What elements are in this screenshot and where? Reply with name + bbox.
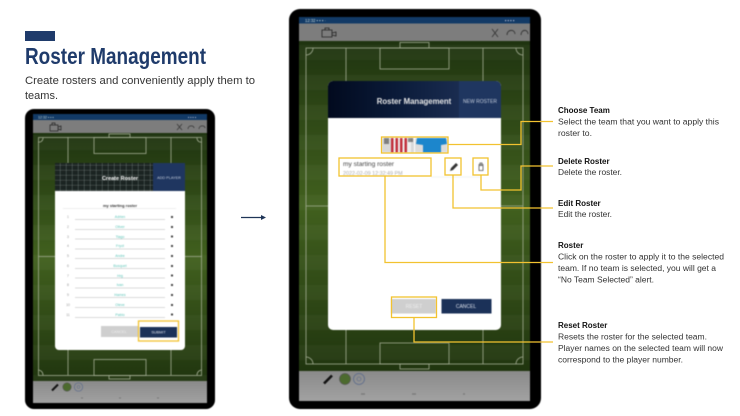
description text: teams. — [25, 90, 58, 102]
player list: Tiago — [116, 235, 124, 239]
modal: roster management — [328, 81, 501, 330]
player list: 11 — [66, 313, 70, 317]
status bar: 12:32 ▪ ▪ ▪ · — [305, 18, 326, 23]
description text — [25, 75, 255, 102]
status bar: ▪ ▪ ▪ ▪ — [188, 116, 196, 120]
roster entry — [343, 161, 480, 177]
annotation: choose team — [558, 106, 719, 138]
player list: Hrg — [117, 274, 123, 278]
icon: delete trash — [478, 163, 484, 170]
submit button: SUBMIT — [151, 330, 166, 334]
annotation: roster: team. If no team is selected, you will get a — [558, 264, 717, 273]
description text: Create rosters and conveniently apply them to — [25, 75, 255, 87]
player list: Oliver — [115, 225, 125, 229]
player list: 10 — [66, 303, 70, 307]
top toolbar — [33, 120, 207, 133]
player list: 3 — [67, 235, 69, 239]
player list: Adrien — [115, 215, 125, 219]
player list: Fryct — [116, 244, 124, 248]
annotation: delete roster: Delete the roster. — [558, 168, 622, 177]
soccer field — [33, 133, 207, 381]
modal header photo — [55, 163, 153, 191]
status bar: 12:32 ▪ ▪ ▪ — [38, 116, 54, 120]
annotation: reset roster: Resets the roster for the selected team. — [558, 332, 707, 342]
annotation: edit roster — [558, 199, 612, 219]
annotation: edit roster: Edit the roster. — [558, 210, 612, 219]
annotation: reset roster — [558, 321, 723, 364]
submit button — [140, 327, 177, 338]
player list — [63, 208, 176, 318]
modal heading: Create Roster — [102, 176, 139, 182]
tablet body — [25, 109, 215, 409]
connector: edit roster — [453, 175, 553, 208]
player list: Pablo — [115, 313, 125, 317]
connector: reset roster — [414, 318, 553, 342]
modal heading: Roster Management — [377, 97, 452, 106]
reset button: RESET — [406, 304, 422, 310]
status bar — [299, 17, 530, 24]
annotation: reset roster: correspond to the player number. — [558, 356, 683, 364]
status bar — [33, 114, 207, 120]
team jerseys — [382, 138, 448, 152]
arrow — [241, 215, 266, 220]
soccer field — [299, 41, 530, 371]
modal: create roster — [55, 163, 185, 350]
annotation: reset roster: Player names on the selected team will now — [558, 344, 723, 353]
connector: delete roster — [481, 166, 553, 190]
left tablet: create roster screen — [25, 109, 215, 409]
highlight: roster — [339, 158, 431, 176]
annotation: choose team: Select the team that you want to apply this — [558, 118, 719, 126]
player list: 1 — [67, 215, 69, 219]
player list: 5 — [67, 254, 69, 258]
highlight: teams — [382, 137, 448, 153]
accent bar — [25, 31, 55, 41]
player list: 7 — [67, 274, 69, 278]
cancel button — [442, 299, 492, 314]
player list: Hames — [114, 293, 126, 297]
highlight: delete — [473, 158, 488, 175]
roster entry: my starting roster — [343, 161, 395, 168]
new roster button: NEW ROSTER — [463, 99, 497, 105]
highlight: reset — [392, 297, 436, 318]
tablet body — [289, 9, 541, 409]
connector: choose team — [448, 122, 553, 144]
player list: Busquet — [113, 264, 127, 268]
annotation: roster — [558, 241, 724, 284]
annotation: choose team: Choose Team — [558, 106, 610, 115]
roster name: my starting roster — [103, 203, 137, 208]
player list: 2 — [67, 225, 69, 229]
add player button — [153, 163, 185, 191]
connector: roster — [385, 176, 553, 262]
bottom toolbar — [33, 381, 207, 403]
annotation: choose team: roster to. — [558, 129, 592, 138]
new roster button — [459, 81, 501, 118]
player list: 6 — [67, 264, 69, 268]
cancel button: CANCEL — [111, 330, 127, 334]
player list: Ivan — [117, 283, 123, 287]
annotation: delete roster: Delete Roster — [558, 157, 610, 166]
top toolbar — [299, 24, 530, 41]
cancel button: CANCEL — [456, 304, 476, 310]
player list: 9 — [67, 293, 69, 297]
bottom toolbar — [299, 371, 530, 401]
player list: 4 — [67, 244, 69, 248]
icon: edit pencil — [450, 163, 458, 171]
annotation: reset roster: Reset Roster — [558, 321, 607, 330]
annotation: roster: Roster — [558, 241, 583, 250]
highlight: submit — [138, 321, 178, 341]
roster entry: 2022-02-09 12:32:49 PM — [343, 171, 403, 177]
right tablet: roster management screen — [289, 9, 541, 409]
reset button — [391, 299, 436, 314]
player list: Andre — [115, 254, 125, 258]
annotation: roster: Click on the roster to apply it to the selected — [558, 252, 724, 262]
title: Roster Management — [25, 43, 206, 69]
modal header — [328, 81, 459, 118]
annotation: delete roster — [558, 157, 622, 177]
callout lines and highlights — [339, 122, 553, 342]
annotation: roster: “No Team Selected” alert. — [558, 276, 654, 284]
highlight: edit — [445, 158, 461, 175]
cancel button — [101, 326, 139, 337]
status bar: ▪ ▪ ▪ ▪ — [505, 18, 515, 23]
annotation: edit roster: Edit Roster — [558, 199, 601, 208]
add player button: ADD PLAYER — [157, 176, 181, 180]
player list: 8 — [67, 283, 69, 287]
player list: Oleve — [115, 303, 125, 307]
